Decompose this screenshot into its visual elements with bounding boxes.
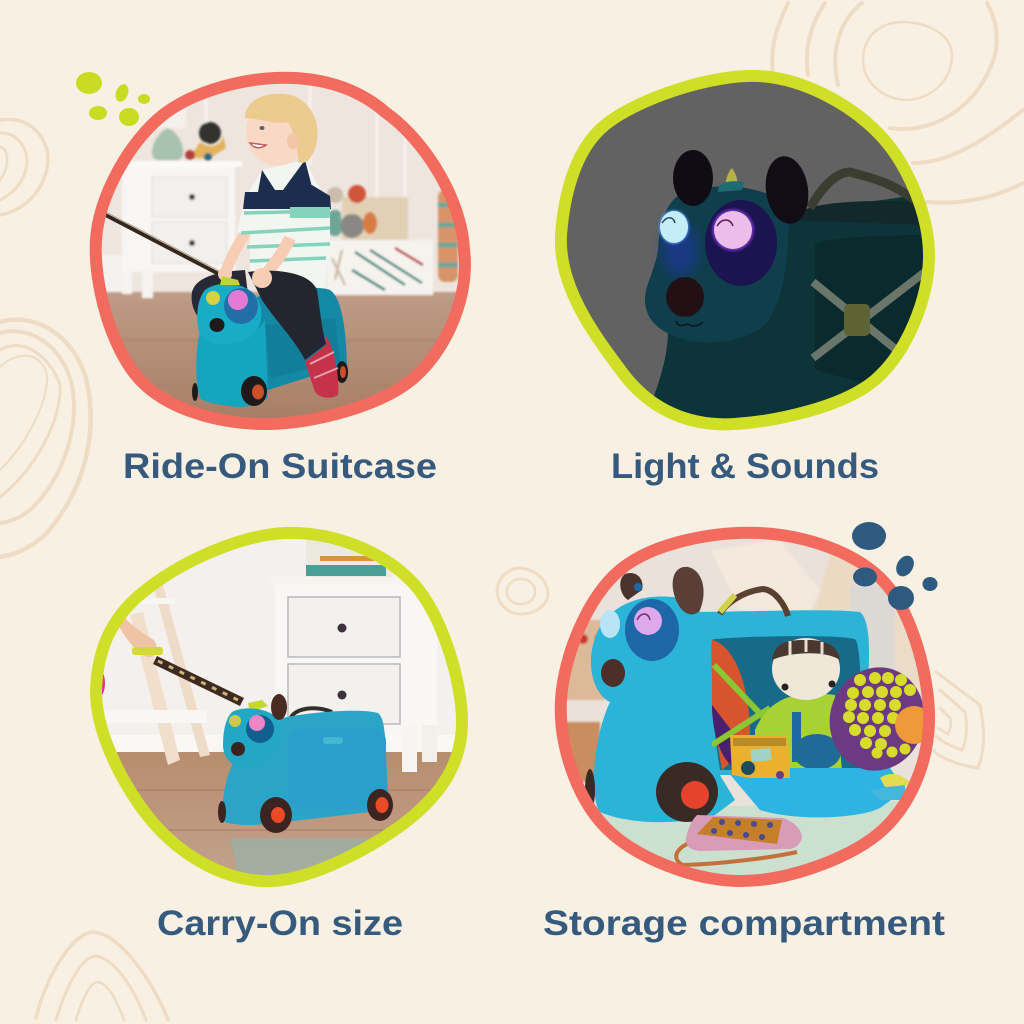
dots accent [852,522,938,610]
blob outline [96,533,462,881]
photo: suitcase pulled by strap [102,539,456,876]
panel: ride-on suitcase [76,70,475,486]
heading: Carry-On size: Carry-On size [157,904,403,943]
blob outline [561,533,929,881]
panel: carry-on size [85,525,475,943]
photo: open suitcase with toys [567,539,924,875]
photo: glowing eyes in the dark [566,82,924,418]
photo: child riding suitcase [102,84,459,418]
dots accent [76,72,150,126]
panel: light and sounds [550,70,940,486]
blob outline [561,76,929,424]
heading: Storage compartment: Storage compartment [543,904,945,943]
panel: storage compartment [543,522,945,943]
blob outline [96,78,465,424]
heading: Light & Sounds: Light & Sounds [611,447,879,486]
heading: Ride-On Suitcase: Ride-On Suitcase [123,447,437,486]
